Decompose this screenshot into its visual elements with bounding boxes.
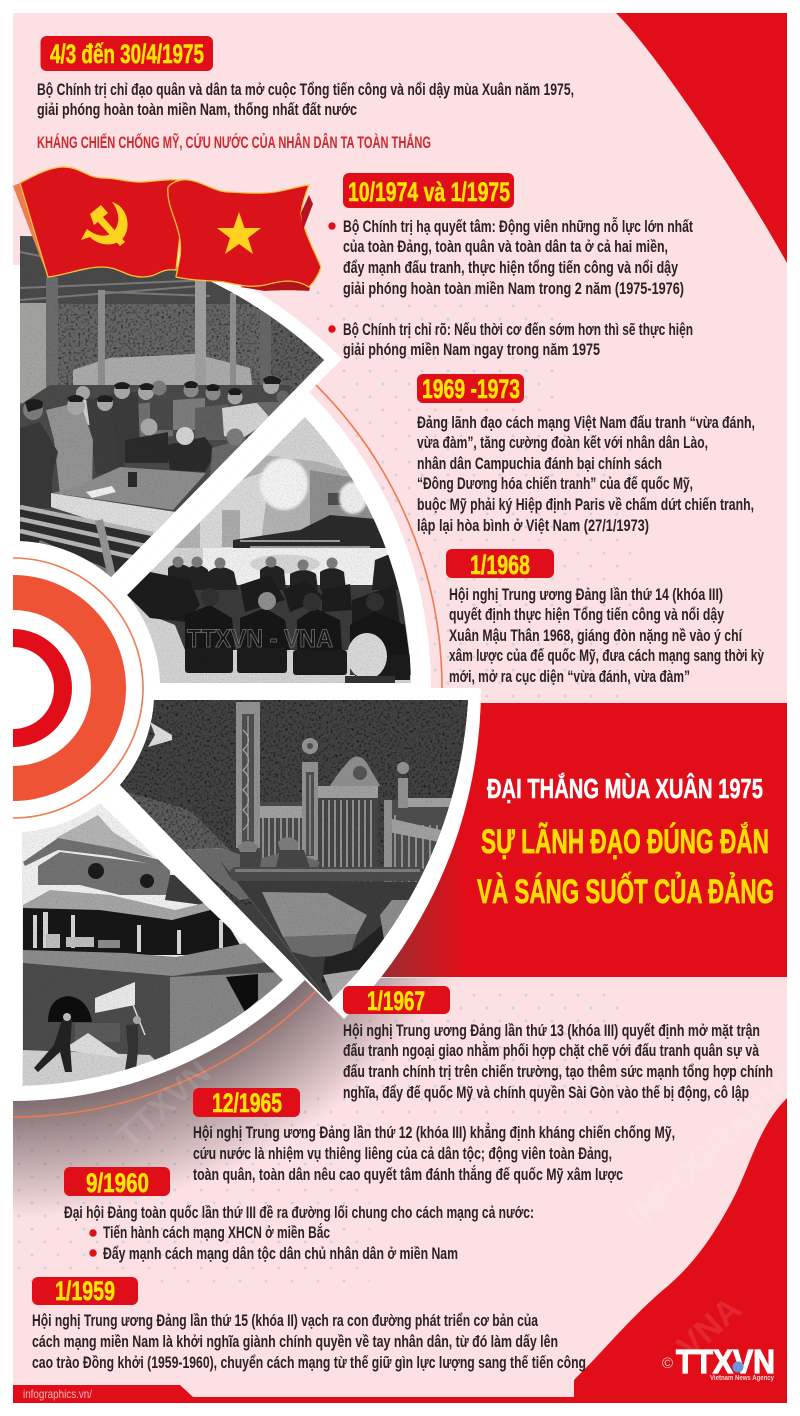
- body text: Hội nghị Trung ương Đảng lần thứ 15 (khóa II) vạch ra con đường phát triển cơ bản của: [32, 1312, 539, 1330]
- soldiers: [34, 1020, 72, 1072]
- soldiers on tank: [185, 848, 320, 900]
- gate crest: [330, 756, 380, 786]
- bullet: south: Đẩy mạnh cách mạng dân tộc dân chủ nhân dân ở miền Nam: [103, 1245, 458, 1263]
- date badge: 9/1960: [86, 1168, 149, 1198]
- section: 1/1968: [446, 549, 765, 686]
- red corner: bottom right: [13, 1098, 787, 1403]
- section: 4/3 den 30/4/1975: [37, 36, 574, 152]
- section: 10/1974 va 1/1975: [328, 173, 693, 359]
- bullet: first point: của toàn Đảng, toàn quân và toàn dân ta ở cả hai miền,: [343, 238, 668, 256]
- pavilion upper storey: [38, 852, 170, 895]
- gate fences: [258, 802, 302, 858]
- chairs: [185, 648, 410, 680]
- thin orange arcs: [13, 385, 442, 1117]
- date badge: 10/1974 và 1/1975: [348, 177, 510, 207]
- ground and sand mound: [23, 1050, 165, 1095]
- body text: giải phóng hoàn toàn miền Nam, thống nhất đất nước: [37, 101, 357, 119]
- red corner: top right: [616, 13, 787, 263]
- body text: Bộ Chính trị chỉ đạo quân và dân ta mở cuộc Tổng tiến công và nổi dậy mùa Xuân năm 1975,: [37, 81, 574, 99]
- body text: [37, 81, 574, 119]
- section: 1/1967: [343, 986, 773, 1102]
- shaded gradient behind photos: [13, 978, 448, 1210]
- title panel: red background: [370, 703, 787, 977]
- body text: cứu nước là nhiệm vụ thiêng liêng của cả dân tộc; động viên toàn Đảng,: [193, 1145, 612, 1163]
- white photo frame: [13, 237, 481, 1101]
- icon: hammer and sickle: [81, 202, 128, 246]
- ground: [323, 970, 360, 998]
- body text: cách mạng miền Nam là khởi nghĩa giành chính quyền về tay nhân dân, từ đó làm dấy lên: [32, 1333, 558, 1351]
- date badge: 12/1965: [212, 1088, 282, 1118]
- title: [477, 773, 774, 911]
- date badge: 1/1968: [470, 550, 530, 580]
- bullet: first point: giải phóng hoàn toàn miền Nam trong 2 năm (1975-1976): [343, 280, 684, 298]
- tank gun barrel: [230, 867, 425, 881]
- pavilion lower roof: [23, 890, 218, 920]
- tank hull: [220, 860, 425, 990]
- flags: [13, 167, 321, 291]
- section: 1969-1973: [417, 374, 755, 535]
- body text: [193, 1123, 675, 1184]
- bullet: north: [89, 1223, 330, 1242]
- flag: Vietnam: [168, 180, 321, 291]
- photo: Paris conference room: [120, 410, 420, 688]
- open hall: [23, 908, 240, 955]
- body text: nhân dân Campuchia đánh bại chính sách: [417, 455, 662, 473]
- delegates: far row: [168, 552, 400, 590]
- section: 9/1960: [64, 1167, 534, 1263]
- date badge: 4/3 đến 30/4/1975: [50, 39, 204, 69]
- photo: leadership meeting in the forest: [15, 232, 335, 585]
- balustrade: [23, 943, 268, 978]
- date badge: 1969 -1973: [422, 374, 520, 404]
- date badge: [40, 36, 213, 71]
- lower gate reflection: [380, 900, 408, 938]
- flag: [148, 722, 172, 747]
- body text: [417, 414, 755, 535]
- bullet: first point: [328, 217, 693, 298]
- standing officers: [20, 392, 282, 508]
- target rings: [0, 558, 143, 818]
- bullet: north: Tiến hành cách mạng XHCN ở miền Bắc: [103, 1223, 330, 1242]
- dark mass of delegates: [127, 585, 412, 675]
- date badge: [343, 173, 514, 208]
- section: 12/1965: [193, 1088, 675, 1184]
- watermarks: [110, 1033, 800, 1366]
- bullet: second point: giải phóng miền Nam ngay trong năm 1975: [343, 341, 600, 359]
- photo: Hue citadel flag raising: [22, 803, 283, 1086]
- icon: globe in logo: [732, 1362, 744, 1372]
- icon: yellow star: [217, 212, 261, 254]
- bullet: first point: đẩy mạnh đấu tranh, thực hiện tổng tiến công và nổi dậy: [343, 259, 679, 277]
- body text: “Đông Dương hóa chiến tranh” của đế quốc Mỹ,: [417, 475, 693, 493]
- body text: Đại hội Đảng toàn quốc lần thứ III đề ra đường lối chung cho cách mạng cả nước:: [64, 1204, 534, 1222]
- delegates: front row: [185, 606, 410, 655]
- body text: lập lại hòa bình ở Việt Nam (27/1/1973): [417, 517, 649, 535]
- date badge: 1/1967: [367, 986, 425, 1016]
- white flag: [95, 982, 135, 1013]
- body text: mới, mở ra cục diện “vừa đánh, vừa đàm”: [449, 668, 690, 686]
- forest background: [58, 300, 324, 404]
- flag: Communist Party: [13, 167, 186, 277]
- red subheading: KHÁNG CHIẾN CHỐNG MỸ, CỨU NƯỚC CỦA NHÂN DÂN TA TOÀN THẮNG: [37, 132, 431, 152]
- seated officers: [125, 432, 168, 463]
- source url: infographics.vn/: [23, 1387, 93, 1401]
- white-haired delegate: [347, 633, 387, 679]
- logo: TTXVN: Vietnam News Agency: [710, 1373, 775, 1382]
- body text: toàn quân, toàn dân nêu cao quyết tâm đánh thắng đế quốc Mỹ xâm lược: [193, 1165, 623, 1184]
- logo: TTXVN: ©: [662, 1355, 673, 1372]
- fortress wall: [23, 962, 295, 1095]
- gate pillars: [236, 702, 409, 890]
- body text: cao trào Đồng khởi (1959-1960), chuyển cách mạng từ thế giữ gìn lực lượng sang thế tiến công: [32, 1354, 586, 1372]
- photo: tank at Independence Palace gate: [120, 700, 468, 1002]
- map table: [53, 467, 206, 510]
- watermarks: TTXVN: [110, 1053, 218, 1156]
- watermarks: VNA: [670, 1290, 749, 1366]
- trees: [115, 695, 475, 905]
- body text: [32, 1312, 586, 1372]
- section: 1/1959: [32, 1276, 586, 1372]
- pavilion upper roof: [56, 815, 153, 857]
- body text: [449, 586, 765, 686]
- wooden benches: [20, 509, 152, 573]
- delegates: middle row: [127, 572, 400, 625]
- TTXVN watermark on photo: TTXVN - VNA: [187, 625, 333, 653]
- logo: TTXVN: TTXVN: [676, 1343, 775, 1380]
- dotted background texture: [13, 285, 640, 1290]
- bullet: second point: [328, 321, 693, 359]
- body text: [343, 1022, 773, 1102]
- date badge: 1/1959: [55, 1276, 115, 1306]
